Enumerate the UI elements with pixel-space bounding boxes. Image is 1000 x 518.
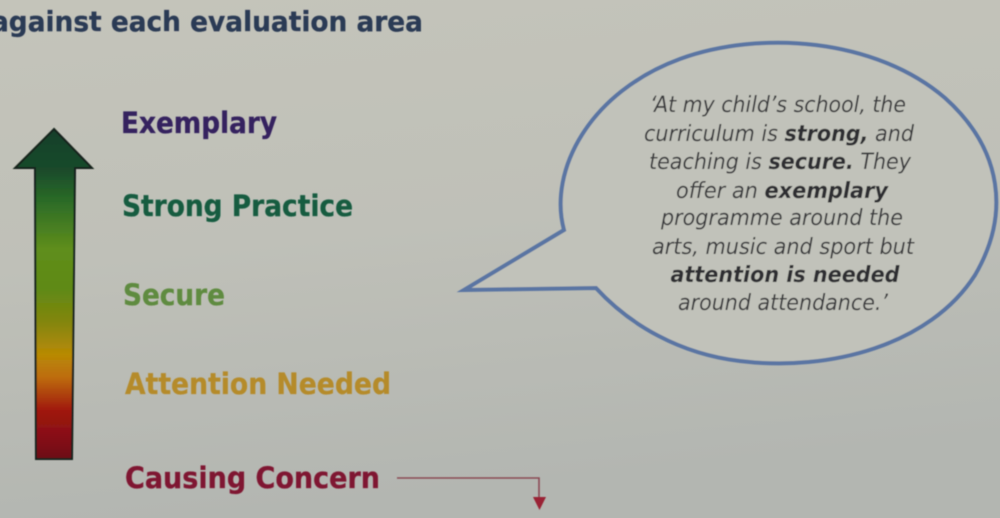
quote text: attention is needed [670, 263, 900, 288]
quote text: programme around the [660, 206, 903, 231]
speech bubble [464, 43, 996, 363]
label: Exemplary: Exemplary [121, 106, 277, 140]
label: Strong Practice: Strong Practice [122, 189, 353, 223]
label: Secure: Secure [123, 278, 225, 312]
quote text: arts, music and sport but [652, 235, 915, 260]
label: Attention Needed: Attention Needed [125, 367, 391, 401]
heading: against each evaluation area [0, 5, 423, 38]
quote text [644, 93, 915, 316]
quote text: teaching is secure. They [649, 150, 912, 175]
quote text: around attendance.’ [678, 291, 889, 316]
label: Causing Concern: Causing Concern [125, 461, 380, 495]
quote text: offer an exemplary [676, 179, 890, 204]
quote text: curriculum is strong, and [644, 122, 915, 147]
quote text: ‘At my child’s school, the [650, 93, 906, 118]
icon: gradient scale arrow [15, 129, 92, 459]
arrow: causing concern pointer [397, 478, 546, 510]
